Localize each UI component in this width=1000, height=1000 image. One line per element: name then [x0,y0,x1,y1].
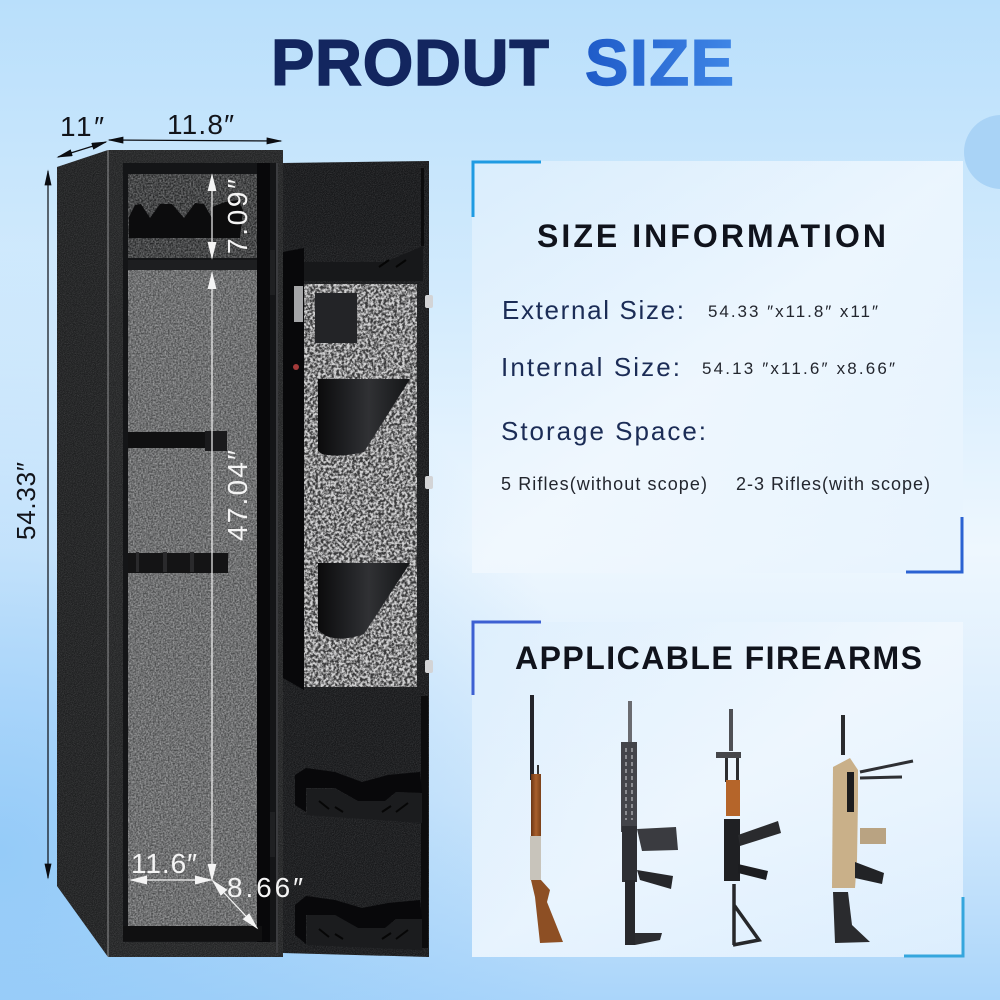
arrow: depth [58,142,106,157]
main felt back [128,270,257,926]
door felt panel [304,284,417,687]
dimension labels: 11.6″ [131,848,197,879]
row: rifles capacity: 2-3 Rifles(with scope) [736,474,930,494]
corner bottom-right [906,517,962,572]
row: external size: 54.33 ″x11.8″ x11″ [708,302,878,321]
barrel rest lower [128,552,228,573]
corner top-left [473,622,541,695]
door [283,161,429,957]
dimension labels [11,109,303,903]
title: PRODUT [271,26,549,99]
corner bottom-right [904,897,963,956]
arrow: internal depth [213,881,257,928]
top compartment felt [128,174,257,258]
safe side wall [57,150,108,957]
title [271,26,734,99]
door hinges pins [425,295,433,673]
heading: size information: SIZE INFORMATION [537,218,886,254]
dimension labels: 54.33″ [11,462,41,540]
status light [293,364,299,370]
row: external size [502,295,878,325]
door pocket lower [318,563,410,639]
corner top-left [473,162,541,217]
firearm: machine gun with bipod [832,715,913,943]
row: rifles capacity [501,474,930,494]
panel: size information [472,161,963,573]
row: rifles capacity: 5 Rifles(without scope) [501,474,707,494]
arrow: internal width [131,879,211,881]
dimension labels: 11.8″ [167,109,234,140]
dimension labels: 8.66″ [227,872,303,903]
door rack upper [295,768,422,823]
row: internal size [501,352,895,382]
arrow: top compartment height [211,175,213,258]
dimension arrows [48,140,281,928]
dimension labels: 7.09″ [222,179,253,254]
door slots [379,260,406,267]
bottom rail [123,926,262,941]
row: storage space: Storage Space: [501,416,706,446]
arrow: internal height [211,273,213,880]
firearm: shotgun [530,695,563,943]
row: internal size: 54.13 ″x11.6″ x8.66″ [702,359,895,378]
top gun rack [129,200,243,238]
heading: applicable firearms: APPLICABLE FIREARMS [515,640,922,676]
row: internal size: Internal Size: [501,352,680,382]
dimension labels: 47.04″ [222,450,253,541]
row: external size: External Size: [502,295,684,325]
firearm: AR rifle [621,701,678,945]
title: SIZE [585,26,734,99]
firearm: folding stock rifle [716,709,781,945]
decorative circle [964,115,1000,189]
barrel rest upper [128,431,227,451]
arrow: external width [109,140,281,141]
door rack lower [295,896,422,950]
panel: applicable firearms [472,622,963,957]
door panel strip [283,248,304,690]
arrow: external height [47,171,49,878]
latch [294,286,303,322]
dimension labels: 11″ [60,111,104,142]
door pocket upper [318,379,410,456]
safe front frame [108,150,283,957]
shelf [128,260,257,270]
battery box [315,293,357,343]
safe illustration [57,150,433,957]
